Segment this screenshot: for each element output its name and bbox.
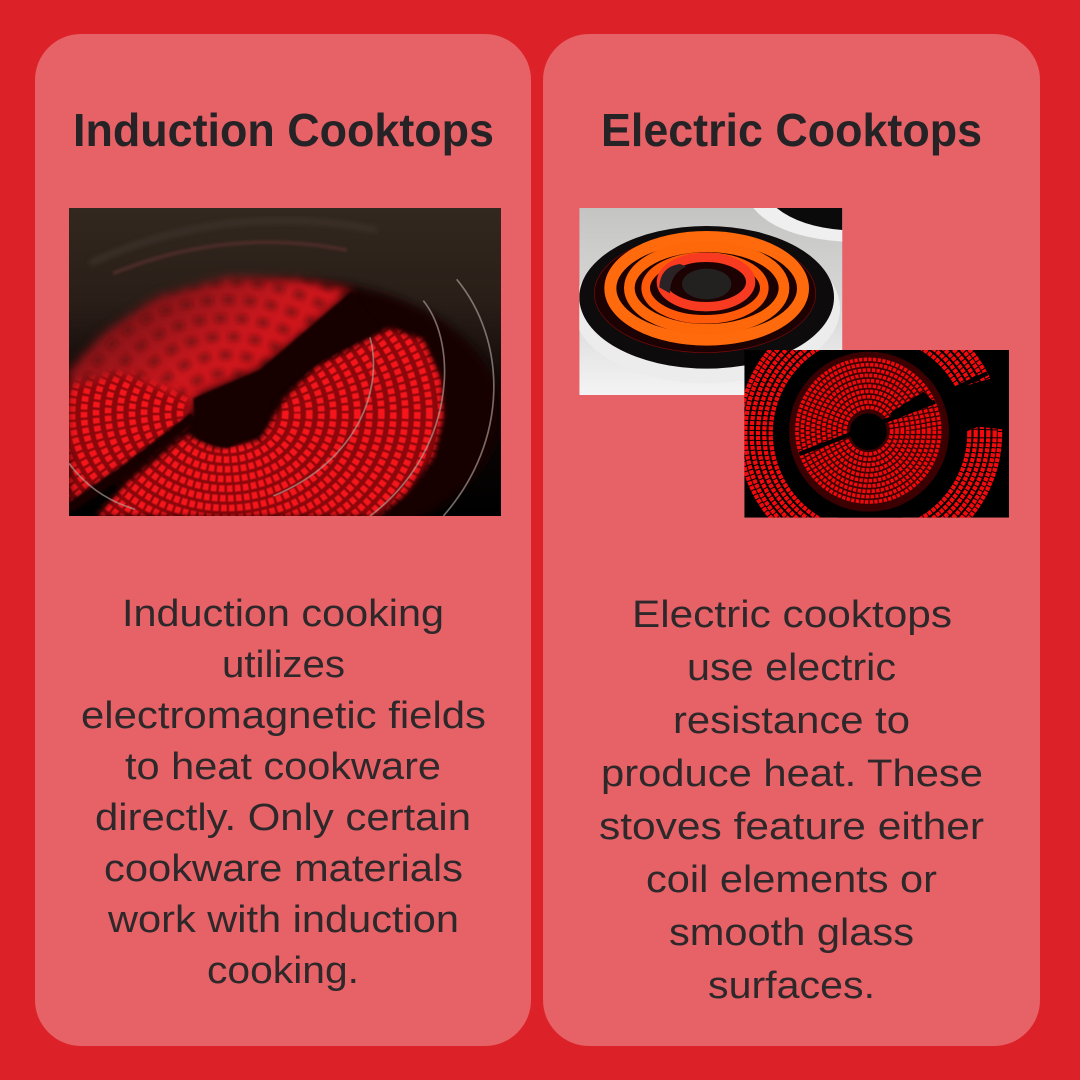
- photo: glowing red radiant element: [744, 350, 1009, 518]
- body text: induction description: work with induction: [107, 899, 459, 941]
- body text: electric description: [599, 594, 984, 1007]
- panel: electric cooktops: [543, 34, 1040, 1046]
- photo: glowing orange coil burner: [579, 208, 842, 395]
- panel: induction cooktops: [0, 34, 531, 1046]
- body text: electric description: produce heat. These: [601, 753, 983, 795]
- heading: electric cooktops: Electric Cooktops: [601, 104, 982, 156]
- body text: induction description: [81, 593, 486, 992]
- photo: glowing induction cooktop close-up: [69, 208, 501, 516]
- body text: electric description: smooth glass: [669, 912, 914, 954]
- body text: induction description: Induction cooking: [122, 593, 444, 635]
- body text: electric description: surfaces.: [708, 965, 875, 1007]
- body text: induction description: cookware materials: [104, 848, 463, 890]
- body text: electric description: Electric cooktops: [632, 594, 952, 636]
- body text: induction description: utilizes: [222, 644, 345, 686]
- panel background: electric: [543, 34, 1040, 1046]
- body text: induction description: to heat cookware: [125, 746, 441, 788]
- body text: induction description: cooking.: [207, 950, 359, 992]
- body text: electric description: stoves feature either: [599, 806, 984, 848]
- body text: induction description: directly. Only certain: [95, 797, 471, 839]
- body text: induction description: electromagnetic fields: [81, 695, 486, 737]
- body text: electric description: coil elements or: [646, 859, 937, 901]
- heading: induction cooktops: Induction Cooktops: [73, 104, 494, 156]
- panel background: induction: [35, 34, 531, 1046]
- body text: electric description: resistance to: [673, 700, 910, 742]
- body text: electric description: use electric: [687, 647, 896, 689]
